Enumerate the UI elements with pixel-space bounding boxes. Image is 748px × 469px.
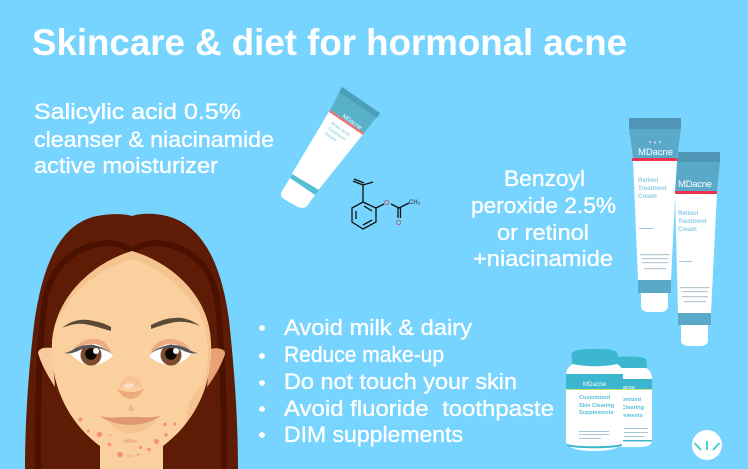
acne spots xyxy=(78,418,176,457)
product: supplement bottle front: Customized xyxy=(579,395,610,401)
icon: chemical structure: CH₃ xyxy=(409,200,421,206)
product: supplement bottle front: MDacne xyxy=(583,382,607,388)
product: retinol tube back: MDacne xyxy=(638,147,673,158)
bullet list: lifestyle tips: Avoid fluoride toothpaste xyxy=(284,396,554,421)
product: body acne treatment tube xyxy=(281,87,380,208)
text block: cleanser and moisturizer: cleanser & niacinamide xyxy=(34,127,274,152)
product: retinol tube back: Treatment xyxy=(638,186,667,192)
icon: chemical structure: O xyxy=(384,200,390,207)
text block: benzoyl peroxide or retinol: peroxide 2.5% xyxy=(471,193,616,218)
logo badge xyxy=(692,430,722,460)
product: retinol tube front: Cream xyxy=(678,227,697,233)
text block: cleanser and moisturizer: Salicylic acid 0.5% xyxy=(34,99,241,124)
text block: benzoyl peroxide or retinol: +niacinamide xyxy=(473,246,613,271)
product: supplement bottle back: lements xyxy=(622,413,643,419)
bullet list: lifestyle tips: Reduce make-up xyxy=(284,342,444,367)
icon: chemical structure: O xyxy=(396,220,402,227)
product: retinol tube front: MDacne xyxy=(678,179,712,190)
product: supplement bottle back: omized xyxy=(622,397,641,403)
product: supplement bottle back xyxy=(612,356,652,447)
text block: benzoyl peroxide or retinol: Benzoyl xyxy=(504,166,585,191)
illustration: woman with acne xyxy=(25,214,238,469)
product: retinol tube front: Retinol xyxy=(678,211,699,217)
product: retinol tube front xyxy=(675,152,720,346)
product: retinol tube back: Retinol xyxy=(638,178,659,184)
product: retinol tube back: Cream xyxy=(638,194,657,200)
product: supplement bottle back: Clearing xyxy=(622,405,644,411)
product: retinol tube front: Treatment xyxy=(678,219,707,225)
text block: benzoyl peroxide or retinol: or retinol xyxy=(497,220,589,245)
product: supplement bottle front xyxy=(566,349,623,451)
product: body acne treatment tube: Body Acne xyxy=(330,121,351,137)
product: body acne treatment tube: Cream xyxy=(324,131,338,143)
product: supplement bottle back: acne xyxy=(623,385,635,391)
title: Skincare & diet for hormonal acne xyxy=(32,22,627,63)
product: retinol tube back xyxy=(629,118,681,312)
product: body acne treatment tube: MDacne xyxy=(341,114,363,132)
bullet list: lifestyle tips: DIM supplements xyxy=(284,422,463,447)
text block: cleanser and moisturizer xyxy=(34,99,274,178)
text block: cleanser and moisturizer: active moisturizer xyxy=(34,153,219,178)
icon: chemical structure xyxy=(352,179,421,229)
product: supplement bottle front: Skin Clearing xyxy=(579,403,614,409)
text block: benzoyl peroxide or retinol xyxy=(471,166,616,271)
product: supplement bottle front: Supplements xyxy=(579,410,614,416)
product: body acne treatment tube: Treatment xyxy=(327,126,347,142)
bullet list: lifestyle tips: Do not touch your skin xyxy=(284,369,517,394)
bullet list: lifestyle tips xyxy=(259,315,554,447)
bullet list: lifestyle tips: Avoid milk & dairy xyxy=(284,315,473,340)
